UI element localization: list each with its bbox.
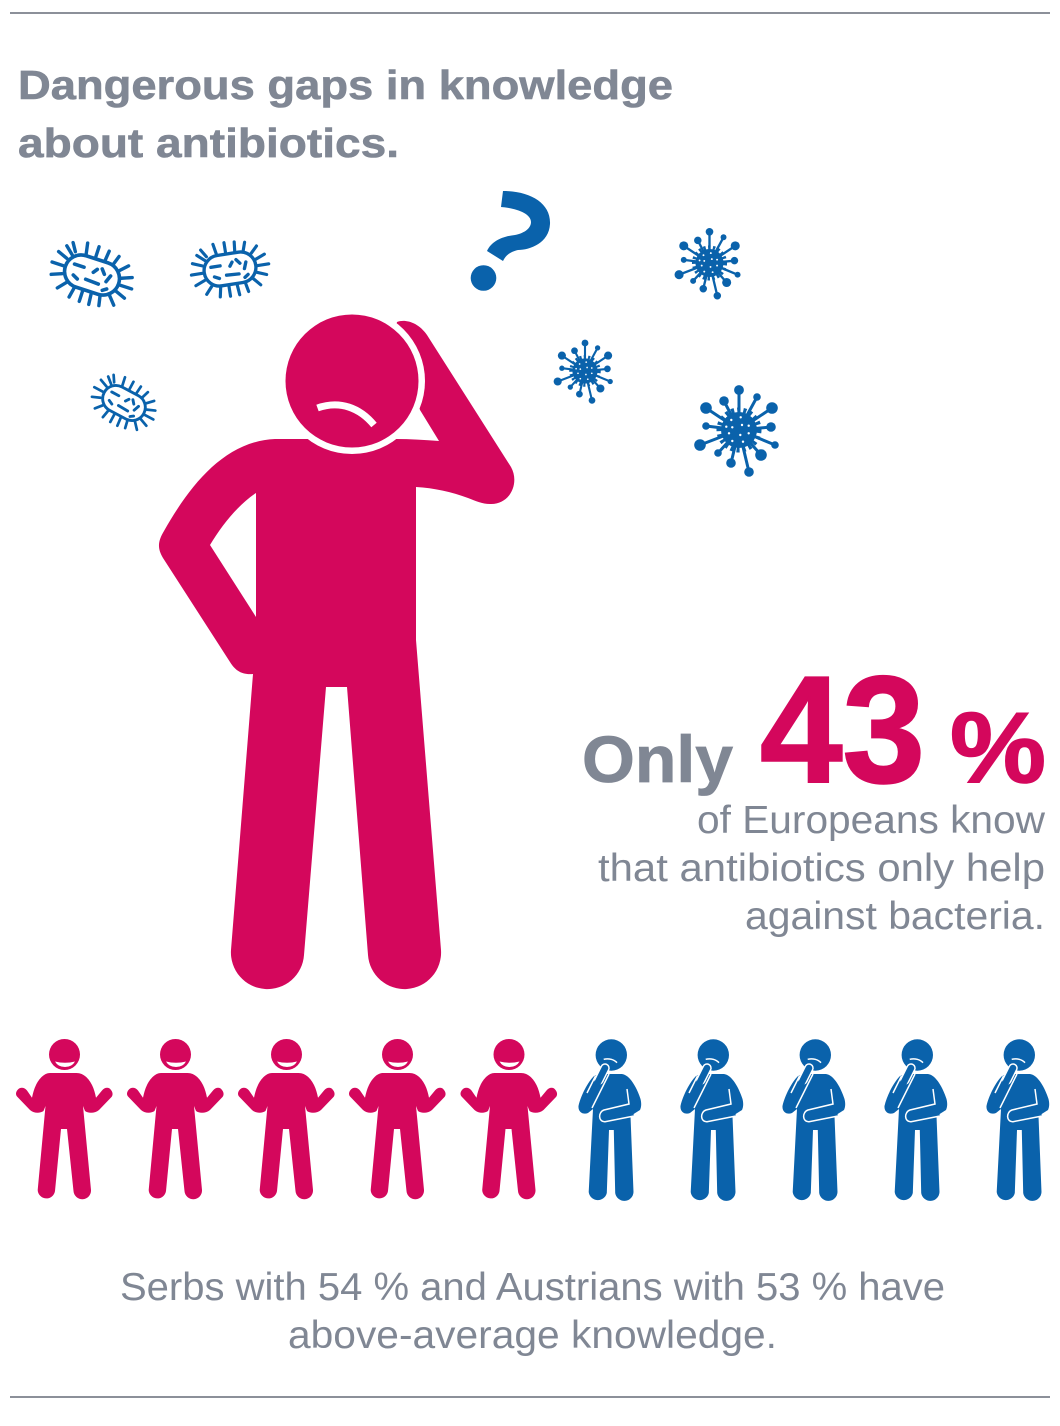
pictogram row: 5 pink figures	[16, 1039, 557, 1199]
callout: 43 percent statistic: Only	[582, 722, 733, 796]
icon: bacterium 3	[83, 367, 165, 439]
top rule	[10, 12, 1050, 14]
frown	[318, 405, 374, 425]
icon: bacterium 2	[187, 236, 273, 302]
icon: bacterium 1	[43, 234, 141, 316]
callout: 43 percent statistic: %	[950, 692, 1046, 804]
callout: 43 percent statistic	[582, 645, 1046, 938]
icon: virus small	[554, 340, 613, 404]
bottom text: Serbs with 54 % and Austrians with 53 % have	[120, 1266, 945, 1309]
large confused person	[159, 308, 514, 989]
bottom rule	[10, 1396, 1050, 1398]
title: about antibiotics.	[18, 120, 399, 166]
bottom text	[120, 1266, 945, 1357]
callout: 43 percent statistic: against bacteria.	[745, 895, 1045, 938]
callout: 43 percent statistic: of Europeans know	[697, 799, 1046, 842]
bottom text: above-average knowledge.	[288, 1314, 777, 1357]
gap around head	[279, 308, 425, 454]
callout: 43 percent statistic: that antibiotics only help	[598, 847, 1045, 890]
icon: question mark	[471, 191, 550, 291]
icon: virus medium	[675, 228, 741, 300]
title	[18, 62, 673, 166]
callout: 43 percent statistic: 43	[760, 645, 925, 815]
icon: virus large	[694, 385, 779, 477]
head	[286, 314, 418, 448]
pictogram row: 5 blue figures	[578, 1039, 1049, 1201]
title: Dangerous gaps in knowledge	[18, 62, 673, 108]
